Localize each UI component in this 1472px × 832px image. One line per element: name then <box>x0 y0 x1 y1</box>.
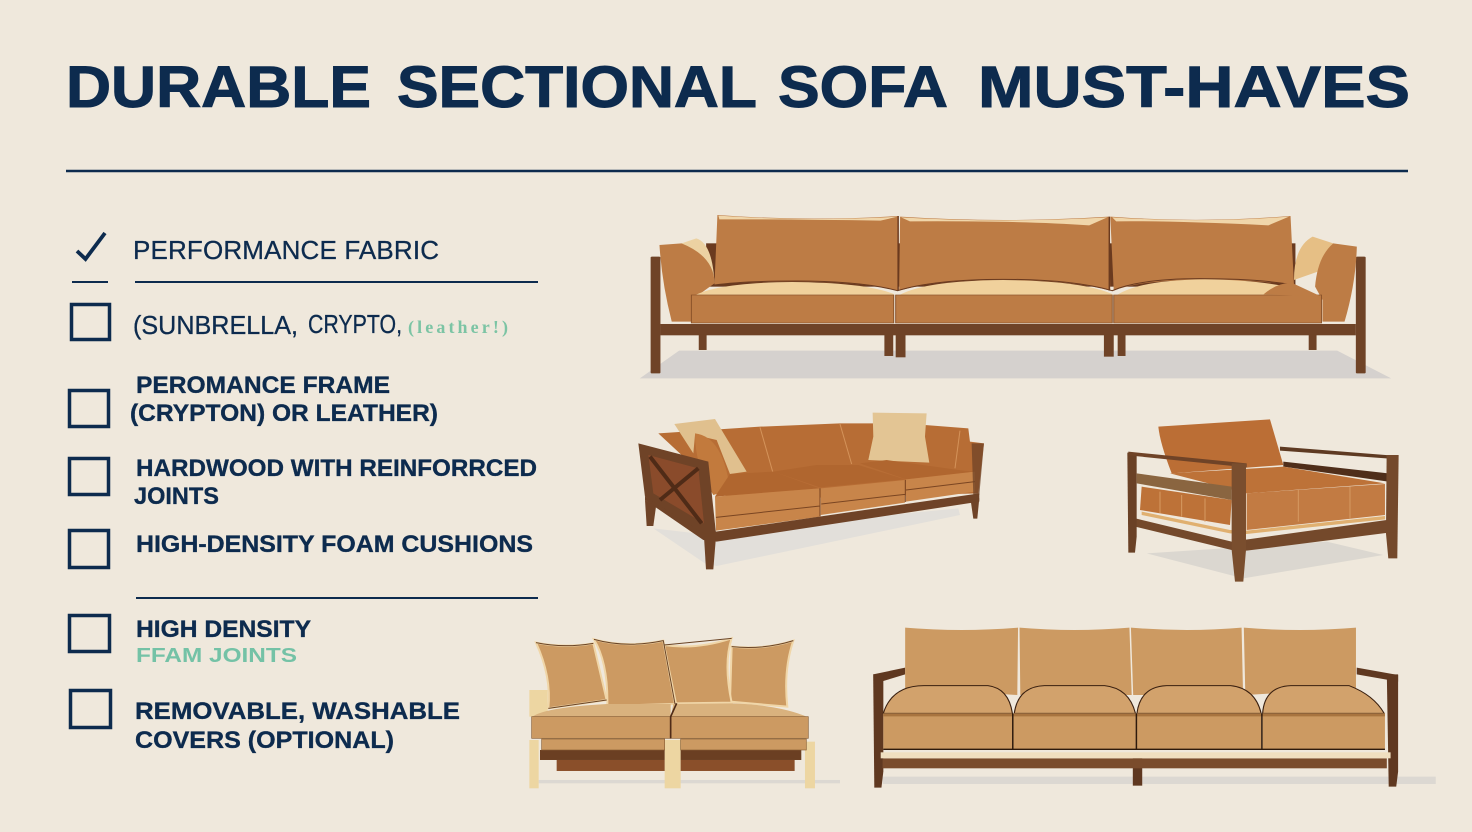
icon: checkbox 4 <box>70 530 108 568</box>
item: performance frame: (CRYPTON) OR LEATHER) <box>130 400 438 427</box>
item: fabric brands <box>133 309 508 340</box>
item: high-density foam cushions: HIGH-DENSITY FOAM CUSHIONS <box>136 531 533 558</box>
icon: checkbox 5 <box>70 616 110 652</box>
title: SECTIONAL <box>397 55 757 120</box>
item: removable covers: REMOVABLE, WASHABLE <box>135 698 460 725</box>
illustration: four-seat sofa <box>873 628 1436 788</box>
title: SOFA <box>778 55 948 120</box>
item: performance frame <box>130 372 438 427</box>
title: DURABLE <box>66 55 371 120</box>
icon: check mark <box>77 233 105 259</box>
item: high density foam joints <box>136 616 311 667</box>
item: fabric brands: (leather!) <box>408 317 508 338</box>
item: hardwood <box>134 455 537 510</box>
item: performance fabric: PERFORMANCE FABRIC <box>133 235 439 265</box>
cushions <box>536 638 793 708</box>
illustration: two-seat sofa with cushions <box>529 638 840 788</box>
item: high density foam joints: HIGH DENSITY <box>136 616 311 643</box>
icon: checkbox 3 <box>70 458 108 494</box>
item: hardwood: HARDWOOD WITH REINFORRCED <box>136 455 537 482</box>
illustration: armchair <box>1127 419 1399 582</box>
item: removable covers: COVERS (OPTIONAL) <box>135 727 394 754</box>
pillow: right cream <box>868 413 929 463</box>
item: fabric brands: CRYPTO, <box>308 309 402 339</box>
pillow: left cream <box>674 419 747 474</box>
illustration: long three-seat sofa <box>640 215 1391 378</box>
checklist <box>70 233 538 754</box>
item: removable covers <box>135 698 460 754</box>
title <box>66 55 1410 120</box>
icon: checkbox 2 <box>70 390 108 426</box>
title: MUST-HAVES <box>978 55 1410 120</box>
item: high density foam joints: FFAM JOINTS <box>136 645 297 667</box>
icon: checkbox 6 <box>70 690 110 728</box>
item: performance frame: PEROMANCE FRAME <box>136 372 390 399</box>
item: fabric brands: (SUNBRELLA, <box>133 310 298 340</box>
illustration: three-seat sofa, angled view <box>638 413 984 569</box>
item: hardwood: JOINTS <box>134 483 219 510</box>
icon: checkbox 1 <box>72 304 110 340</box>
